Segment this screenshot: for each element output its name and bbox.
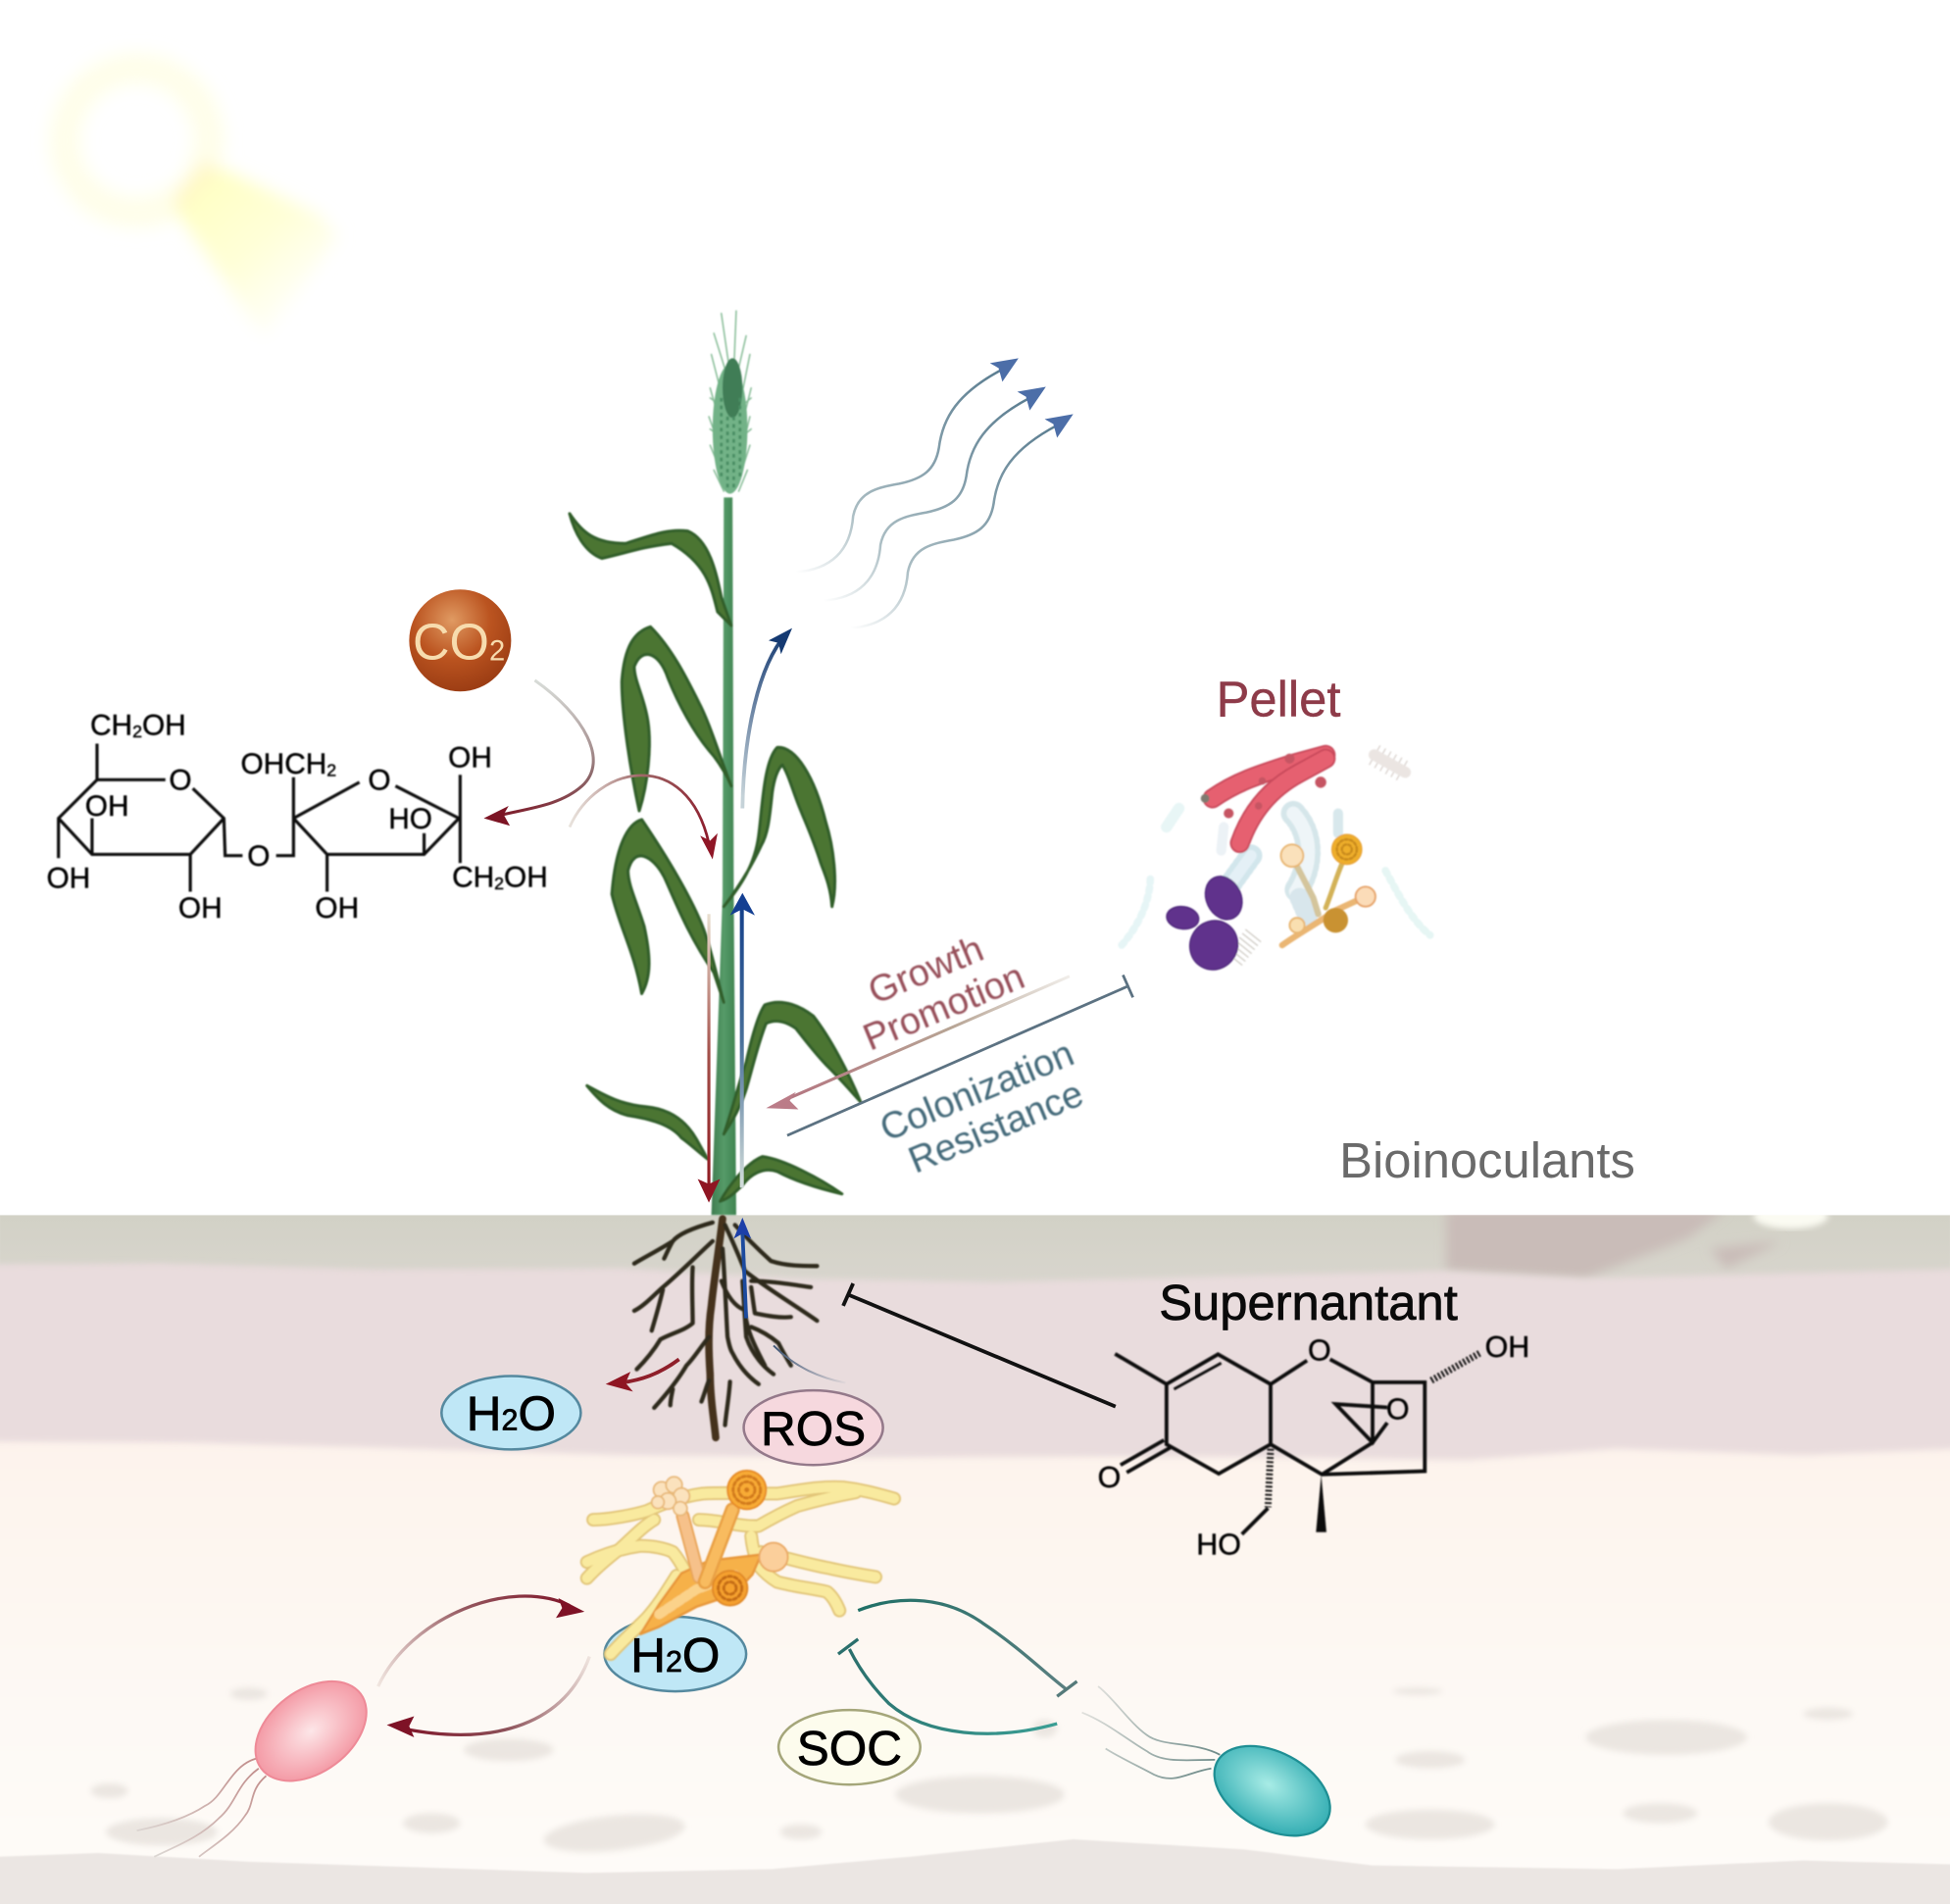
arrow: fungus to beneficial bacterium	[387, 1657, 589, 1737]
sucrose atom labels: OHCH	[241, 748, 326, 780]
leaf: mid right	[724, 1002, 861, 1134]
toxin atom labels	[1098, 1330, 1529, 1562]
bubble: SOC: SOC	[797, 1722, 902, 1776]
mauve reflection on topsoil	[1446, 1209, 1782, 1278]
icon: sun	[65, 69, 338, 338]
label: H2O lower: H2O	[630, 1628, 720, 1682]
cell body	[1199, 1728, 1345, 1854]
flagella	[137, 1759, 266, 1857]
gray bristled cells	[1233, 755, 1405, 960]
arrow: root water loss	[606, 1359, 679, 1391]
sucrose atom labels: O	[247, 840, 270, 873]
sucrose atom labels: OH	[504, 861, 548, 893]
sun ring	[65, 69, 209, 213]
sucrose atom labels: OH	[178, 892, 223, 925]
spore cluster: pale	[652, 1477, 689, 1516]
inhibition line: colonization resistance	[787, 975, 1133, 1135]
bubble: H2O lower	[605, 1617, 746, 1691]
sucrose atom labels: OH	[142, 710, 186, 742]
line: ROS emission	[774, 1345, 846, 1383]
fungal mycelium	[587, 1471, 894, 1654]
heading: Pellet: Pellet	[1217, 672, 1340, 727]
bubble: H2O upper: H2O	[467, 1387, 556, 1441]
CO2 sphere: CO	[413, 614, 489, 671]
stem	[712, 497, 736, 1215]
sun beam	[173, 168, 338, 338]
sucrose atom labels: OH	[85, 790, 128, 823]
label: Growth Promotion	[842, 918, 1030, 1059]
leaf: top left	[570, 514, 731, 626]
bubble: H2O upper	[441, 1377, 580, 1449]
cream soil layer	[0, 1441, 1950, 1904]
soil layers	[0, 1181, 1950, 1904]
pink soil layer	[0, 1264, 1950, 1479]
inhibition: fungus to pathogen	[858, 1600, 1077, 1696]
bubble: ROS: ROS	[761, 1402, 866, 1456]
arrow: sucrose to plant	[570, 776, 718, 860]
heading: Supernantant: Supernantant	[1159, 1275, 1458, 1330]
toxin atom labels: O	[1098, 1461, 1121, 1494]
toxin atom labels: O	[1308, 1334, 1331, 1368]
wavy arrow 1	[796, 358, 1019, 572]
inhibition: pathogen to fungus	[838, 1639, 1057, 1733]
yellow hyphae fill	[587, 1487, 894, 1654]
sucrose atom labels: CH	[452, 861, 494, 893]
leaves	[570, 514, 861, 1201]
sucrose atom labels: OH	[315, 892, 359, 925]
beam warm spots	[175, 159, 218, 212]
sucrose atom labels: O	[169, 764, 192, 796]
sucrose atom labels: 2	[132, 722, 142, 741]
bottom gray layer	[0, 1839, 1950, 1904]
arrow: sugar down the stem	[698, 914, 720, 1203]
arrow: water up the stem	[730, 893, 755, 1187]
label: Colonization Resistance: Resistance	[903, 1074, 1089, 1182]
label: Colonization Resistance: Colonization	[875, 1032, 1079, 1149]
sucrose bonds	[59, 744, 460, 891]
sporangium: orange	[727, 1471, 766, 1509]
sucrose atom labels: HO	[388, 803, 432, 835]
arrow: beneficial bacterium to fungus	[378, 1596, 584, 1686]
wheat spike	[709, 311, 751, 494]
toxin molecule	[1098, 1330, 1529, 1562]
toxin atom labels: O	[1386, 1392, 1410, 1426]
toxin atom labels: OH	[1485, 1330, 1529, 1364]
gray topsoil layer	[0, 1215, 1950, 1327]
arrow: CO2 to sucrose	[483, 680, 593, 826]
pathogenic bacterium	[1082, 1686, 1345, 1854]
yellow hyphae outline	[587, 1487, 894, 1654]
toxin stereo wedge	[1316, 1475, 1326, 1532]
soil pebbles	[91, 1687, 1888, 1858]
orange hyphal bundle	[640, 1555, 761, 1634]
arrow: growth promotion	[766, 977, 1070, 1109]
leaf: upper left	[622, 626, 731, 811]
heading: Bioinoculants: Bioinoculants	[1339, 1132, 1635, 1188]
cell body	[236, 1661, 385, 1801]
vesicle: peach	[759, 1543, 788, 1572]
sucrose atom labels: O	[368, 764, 391, 796]
red hyphae	[1201, 754, 1326, 843]
label: Growth Promotion: Promotion	[858, 956, 1030, 1059]
transpiration wavy arrows	[796, 358, 1074, 628]
purple cells	[1165, 871, 1249, 978]
pale bristled cells	[1122, 808, 1430, 945]
sucrose atom labels: CH	[90, 710, 132, 742]
leaf: lower left	[612, 820, 724, 1002]
leaf: low left	[587, 1085, 708, 1159]
leaf: upper right	[724, 747, 835, 907]
yellow fungus	[1281, 834, 1375, 945]
wavy arrow 2	[824, 386, 1046, 601]
wavy arrow 3	[851, 414, 1074, 628]
toxin bonds	[1115, 1353, 1479, 1534]
leaf: low right	[720, 1157, 842, 1201]
arrow: water up to air	[742, 628, 792, 808]
sucrose atom labels: 2	[326, 761, 336, 780]
toxin atom labels: HO	[1196, 1528, 1241, 1562]
bubble: ROS	[744, 1390, 883, 1465]
label: Growth Promotion: Growth	[863, 928, 989, 1013]
roots	[634, 1219, 817, 1437]
white highlight at horizon	[1754, 1204, 1828, 1228]
beneficial bacterium	[137, 1661, 385, 1857]
sporangium: dark	[713, 1571, 747, 1606]
CO2 sphere: 2	[489, 636, 505, 668]
sucrose atom labels: OH	[46, 863, 90, 895]
flagella	[1082, 1686, 1220, 1779]
sucrose atom labels: OH	[448, 742, 492, 775]
sucrose atom labels: 2	[494, 874, 504, 893]
wheat plant	[570, 311, 861, 1215]
arrow: water to roots	[733, 1218, 751, 1319]
inhibition line: supernatant to roots	[843, 1283, 1116, 1407]
sucrose molecule	[46, 710, 548, 925]
sucrose atom labels	[46, 710, 548, 925]
microbe pellet cluster	[1122, 754, 1430, 978]
CO2 sphere	[409, 589, 511, 691]
bubble: SOC	[778, 1710, 921, 1784]
